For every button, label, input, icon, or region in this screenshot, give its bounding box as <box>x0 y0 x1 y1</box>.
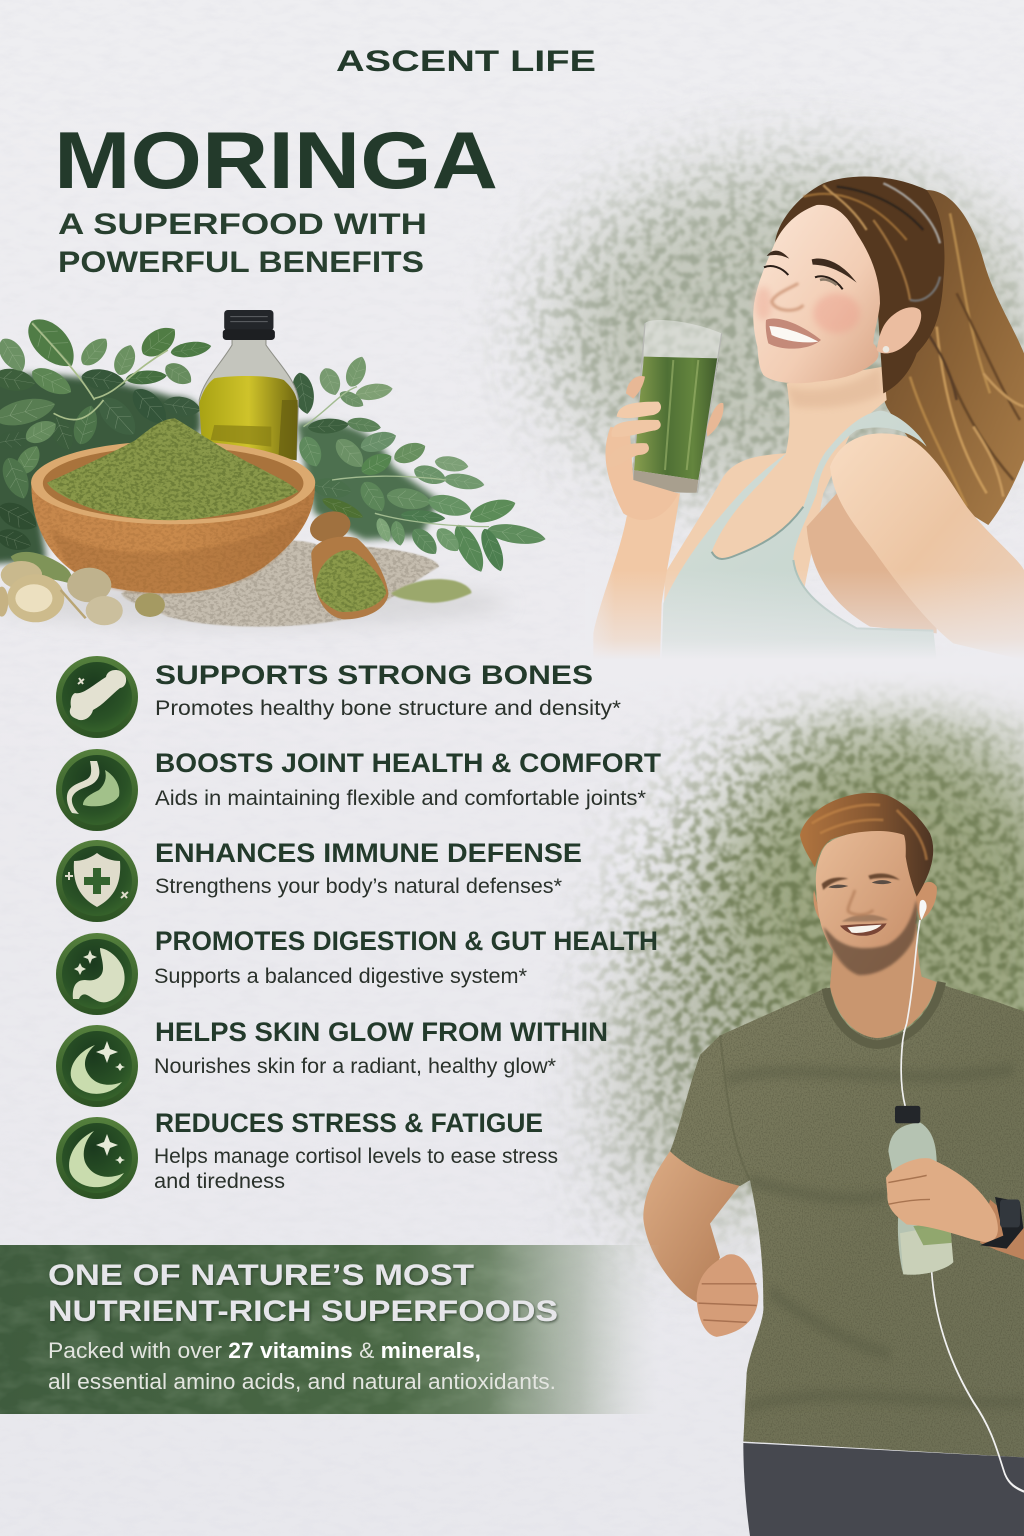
woman drinking green juice <box>593 177 1024 660</box>
shoulder and arm <box>830 433 1024 660</box>
moringa powder <box>47 418 298 520</box>
hair <box>800 793 933 897</box>
ear <box>877 307 921 353</box>
benefit: stress and fatigue <box>56 1108 558 1199</box>
benefit: skin glow <box>56 1017 608 1107</box>
icon: moon and stars <box>56 1117 138 1199</box>
left stems <box>32 323 168 420</box>
banner background <box>0 1245 660 1414</box>
earphone cable <box>901 1031 1024 1492</box>
subtitle <box>58 208 427 279</box>
eyes <box>828 880 892 888</box>
nose <box>772 283 803 310</box>
face <box>753 205 880 383</box>
icon: stomach <box>56 933 138 1015</box>
benefit: strong bones <box>56 656 621 738</box>
banner heading: NUTRIENT-RICH SUPERFOODS <box>48 1295 558 1328</box>
moustache <box>842 915 888 922</box>
right stems <box>303 387 489 527</box>
earphone cable upper <box>902 920 920 1047</box>
description: Aids in maintaining flexible and comfortable joints* <box>155 787 646 810</box>
cheek blush <box>813 293 860 333</box>
right foliage shadow mass <box>296 422 439 540</box>
heading: BOOSTS JOINT HEALTH & COMFORT <box>155 748 662 778</box>
neck <box>785 367 887 460</box>
chest and torso <box>663 420 857 627</box>
woman bottom fade <box>570 570 1024 670</box>
description: and tiredness <box>154 1170 285 1193</box>
banner text: all essential amino acids, and natural antioxidants. <box>48 1369 556 1394</box>
benefit: digestion <box>56 926 658 1015</box>
underarm shade <box>807 493 937 633</box>
earbud <box>919 900 927 920</box>
description: Nourishes skin for a radiant, healthy glow* <box>154 1055 556 1078</box>
description: Supports a balanced digestive system* <box>154 965 527 988</box>
hair crown <box>775 177 944 393</box>
description: Promotes healthy bone structure and density* <box>155 697 621 720</box>
heading: SUPPORTS STRONG BONES <box>155 660 593 690</box>
teeth <box>769 326 818 342</box>
backdrop fade below woman <box>570 670 1024 730</box>
ponytail <box>883 190 1024 525</box>
t-shirt <box>670 982 1024 1457</box>
subtitle: POWERFUL BENEFITS <box>58 246 424 279</box>
left cheek blush <box>755 287 772 320</box>
forearm <box>980 1199 1024 1260</box>
heading: HELPS SKIN GLOW FROM WITHIN <box>155 1017 608 1047</box>
right leaves <box>289 354 547 576</box>
forearm and hand <box>593 376 724 660</box>
table surface <box>0 580 507 627</box>
benefit: immune defense <box>56 838 582 922</box>
description: Helps manage cortisol levels to ease stress <box>154 1145 558 1168</box>
icon: moon <box>56 1025 138 1107</box>
teeth <box>847 925 882 933</box>
benefit: joint health <box>56 748 662 831</box>
woman left fade <box>585 560 615 670</box>
ears <box>813 882 937 922</box>
face <box>816 830 917 975</box>
earring <box>883 346 889 353</box>
man's head <box>800 793 942 1047</box>
moringa still life <box>0 310 547 627</box>
woman's head <box>753 205 921 383</box>
wooden scoop <box>311 537 388 619</box>
banner: nutrient rich <box>0 1245 660 1414</box>
main title: MORINGA <box>54 116 498 206</box>
heading: REDUCES STRESS & FATIGUE <box>155 1108 543 1138</box>
banner heading: ONE OF NATURE’S MOST <box>48 1259 474 1292</box>
blurred tree backdrop: upper <box>530 170 1024 500</box>
description <box>154 1145 558 1193</box>
banner text: Packed with over 27 vitamins & minerals, <box>48 1338 481 1363</box>
heading: ENHANCES IMMUNE DEFENSE <box>155 838 582 868</box>
brand name: ASCENT LIFE <box>336 45 596 78</box>
burlap cloth <box>121 541 439 627</box>
hand <box>886 1158 998 1242</box>
clenched fist <box>697 1254 758 1337</box>
left foliage shadow mass <box>0 374 201 567</box>
smile <box>840 923 887 936</box>
eyes <box>764 266 843 289</box>
blurred tree backdrop: lower <box>600 715 1024 1240</box>
green juice glass <box>632 320 722 493</box>
collar <box>826 982 942 1045</box>
smart watch <box>980 1197 1023 1249</box>
man jogging <box>643 982 1024 1536</box>
wooden bowl <box>31 441 315 594</box>
running arm <box>643 1151 740 1303</box>
banner heading <box>48 1259 558 1328</box>
hair highlights <box>812 805 927 860</box>
spilled powder <box>391 579 471 603</box>
icon: joint <box>56 749 138 831</box>
oil bottle <box>199 310 298 460</box>
heading: PROMOTES DIGESTION & GUT HEALTH <box>155 926 658 956</box>
eyebrows <box>822 874 900 890</box>
description: Strengthens your body’s natural defenses* <box>155 875 562 898</box>
banner text <box>48 1338 556 1394</box>
moringa pods and seeds <box>0 506 355 625</box>
icon: shield <box>56 840 138 922</box>
beard <box>823 900 918 975</box>
tank top <box>662 411 937 660</box>
lips <box>766 319 821 349</box>
water bottle <box>888 1106 953 1275</box>
shorts <box>743 1443 1024 1536</box>
subtitle: A SUPERFOOD WITH <box>58 208 427 241</box>
eyebrows <box>767 251 857 283</box>
left leaves <box>0 311 213 555</box>
neck <box>830 923 937 1038</box>
nose <box>848 890 873 915</box>
icon: bone <box>56 656 138 738</box>
